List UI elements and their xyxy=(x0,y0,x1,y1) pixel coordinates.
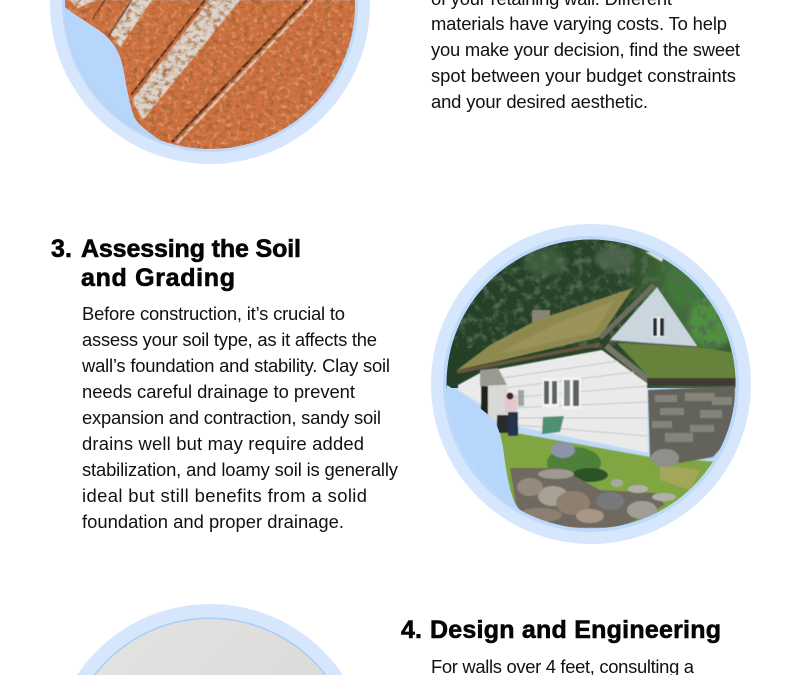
heading: step 3 xyxy=(51,235,301,292)
text block: step 2 description: you make your decision, find the sweet xyxy=(431,39,740,60)
rocks xyxy=(510,468,676,528)
peeled corner xyxy=(65,7,160,140)
panel: step 4 photo circle xyxy=(50,604,370,675)
outer ring xyxy=(50,604,370,675)
text block: step 3 description: foundation and proper drainage. xyxy=(82,511,344,532)
photo: brick and white striped wall xyxy=(60,0,360,150)
grass ground xyxy=(500,432,714,524)
text block: step 3 description: drains well but may require added xyxy=(82,433,364,454)
flower bush xyxy=(546,446,602,472)
text block: step 3 description: assess your soil type, as it affects the xyxy=(82,329,377,350)
text block: step 3 description: ideal but still benefits from a solid xyxy=(82,485,367,506)
heading: step 4: Design and Engineering xyxy=(430,616,721,644)
house walls xyxy=(458,350,648,453)
trees xyxy=(445,238,737,388)
heading: step 4: 4. xyxy=(401,616,422,644)
text block: step 2 description: materials have varying costs. To help xyxy=(431,13,727,34)
text block: step 3 description: expansion and contraction, sandy soil xyxy=(82,407,381,428)
outer ring xyxy=(431,224,751,544)
photo: grey sky xyxy=(65,619,355,675)
lower right turf xyxy=(617,343,735,378)
porch xyxy=(480,368,507,386)
stone wall xyxy=(647,378,737,386)
peeled corner xyxy=(446,385,520,510)
main turf roof xyxy=(457,288,633,370)
photo: white turf-roof house xyxy=(445,238,737,528)
gable xyxy=(610,287,698,347)
person and bench xyxy=(505,395,517,413)
text block: step 3 description: wall’s foundation and stability. Clay soil xyxy=(81,355,390,376)
heading: step 3: Assessing the Soil xyxy=(81,235,301,263)
text block: step 2 description xyxy=(431,0,740,112)
roof eave xyxy=(457,344,600,372)
panel: step 3 photo circle xyxy=(431,224,751,544)
text block: step 3 description xyxy=(81,303,399,532)
text block: step 3 description: Before construction, it’s crucial to xyxy=(82,303,345,324)
outer ring xyxy=(50,0,370,164)
heading: step 3: 3. xyxy=(51,235,72,263)
chimney xyxy=(532,310,550,323)
text block: step 2 description: spot between your budget constraints xyxy=(431,65,736,86)
heading: step 3: and Grading xyxy=(81,264,235,292)
text block: step 3 description: stabilization, and loamy soil is generally xyxy=(82,459,399,480)
text block: step 3 description: needs careful drainage to prevent xyxy=(82,381,355,402)
windows xyxy=(542,378,559,407)
panel: step 2 photo circle xyxy=(50,0,370,164)
text block: step 2 description: and your desired aesthetic. xyxy=(431,91,648,112)
